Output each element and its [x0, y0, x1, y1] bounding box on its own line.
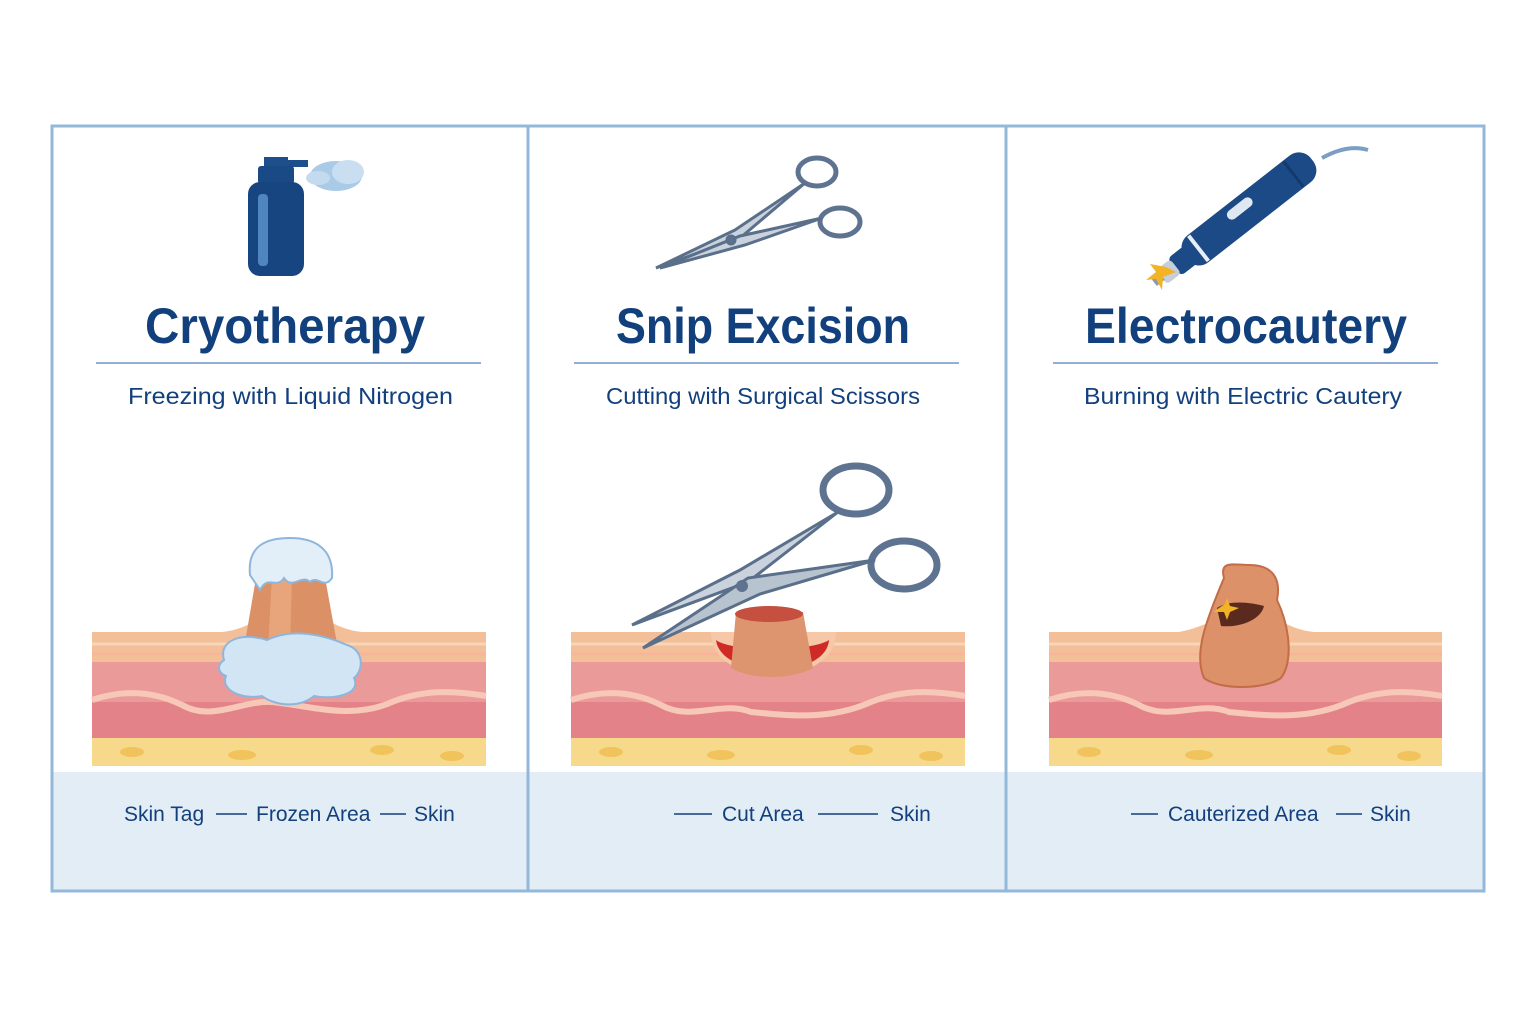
subtitle: Freezing with Liquid Nitrogen	[128, 383, 453, 409]
legend labels	[674, 803, 931, 826]
legend labels: Skin	[890, 803, 931, 826]
icon: small scissors	[656, 158, 860, 268]
panel: cryotherapy	[92, 157, 486, 826]
icon: spray bottle	[248, 157, 364, 276]
legend labels: Skin	[1370, 803, 1411, 826]
subtitle: Cutting with Surgical Scissors	[606, 383, 920, 409]
legend labels: Cut Area	[722, 803, 804, 826]
legend labels: Cauterized Area	[1168, 803, 1319, 826]
title: Snip Excision: Snip Excision	[616, 298, 910, 354]
legend labels: Skin Tag	[124, 803, 204, 826]
skin illustration: cut area	[571, 606, 965, 766]
skin illustration: frozen tag	[92, 538, 486, 766]
legend labels: Skin	[414, 803, 455, 826]
title: Cryotherapy: Cryotherapy	[145, 298, 425, 354]
icon: large scissors	[632, 466, 937, 648]
bottom label band	[52, 772, 1484, 891]
legend labels	[124, 803, 455, 826]
outer frame	[52, 126, 1484, 891]
legend labels	[1131, 803, 1411, 826]
panel: snip excision	[571, 158, 965, 826]
skin illustration: cauterized tag	[1049, 564, 1442, 766]
panel: electrocautery	[1049, 146, 1442, 826]
subtitle: Burning with Electric Cautery	[1084, 383, 1403, 409]
legend labels: Frozen Area	[256, 803, 371, 826]
title: Electrocautery: Electrocautery	[1085, 298, 1407, 354]
icon: cautery pen	[1144, 146, 1368, 296]
